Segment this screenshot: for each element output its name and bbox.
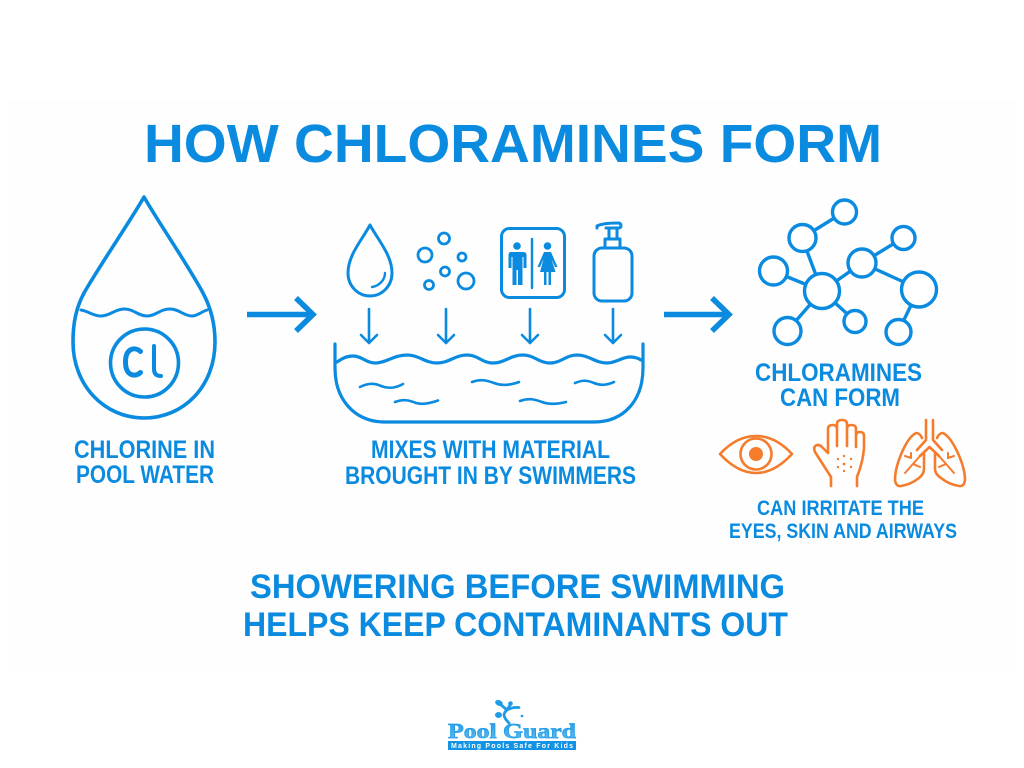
label: mixes with material: MIXES WITH MATERIAL	[371, 436, 610, 464]
logo: Pool Guard: Pool Guard	[448, 719, 576, 743]
label: can irritate	[729, 497, 957, 543]
callout: showering message: HELPS KEEP CONTAMINANTS OUT	[243, 606, 788, 644]
label: can irritate: EYES, SKIN AND AIRWAYS	[729, 520, 957, 543]
label: chloramines can form: CHLORAMINES	[755, 359, 922, 387]
icon: hand with rash	[814, 420, 864, 486]
title: HOW CHLORAMINES FORM	[144, 114, 882, 174]
icon: eye	[720, 436, 792, 473]
icon: soap pump bottle	[594, 223, 632, 301]
label: can irritate: CAN IRRITATE THE	[757, 497, 924, 520]
label: chlorine in pool water	[74, 436, 215, 489]
icon: droplet	[348, 225, 392, 296]
icon: water drop with Cl	[73, 197, 215, 418]
callout: showering message: SHOWERING BEFORE SWIMMING	[250, 568, 785, 606]
panel: chloramines result	[720, 200, 965, 543]
icon: pool basin	[335, 344, 643, 422]
icon: bubbles	[418, 233, 474, 290]
label: chloramines can form	[755, 359, 922, 412]
logo: Pool Guard	[448, 699, 576, 750]
callout: showering message	[243, 568, 788, 644]
panel: chlorine in pool water	[73, 197, 215, 489]
panel: mixes with swimmer material	[335, 223, 643, 490]
icon: splash	[494, 699, 523, 723]
icon: lungs	[895, 420, 965, 486]
arrow: chlorine to mixing	[247, 298, 313, 331]
arrow: mixing to chloramines	[664, 298, 729, 331]
icon: restroom sign	[502, 228, 564, 298]
label: mixes with material: BROUGHT IN BY SWIMMERS	[345, 462, 636, 490]
logo: Pool Guard: Making Pools Safe For Kids	[451, 743, 573, 750]
arrows: into water	[361, 309, 621, 343]
label: chloramines can form: CAN FORM	[780, 384, 900, 412]
label: chlorine in pool water: CHLORINE IN	[74, 436, 215, 464]
label: mixes with material	[345, 436, 636, 490]
label: chlorine in pool water: POOL WATER	[76, 461, 214, 489]
icon: molecule network	[760, 200, 936, 344]
